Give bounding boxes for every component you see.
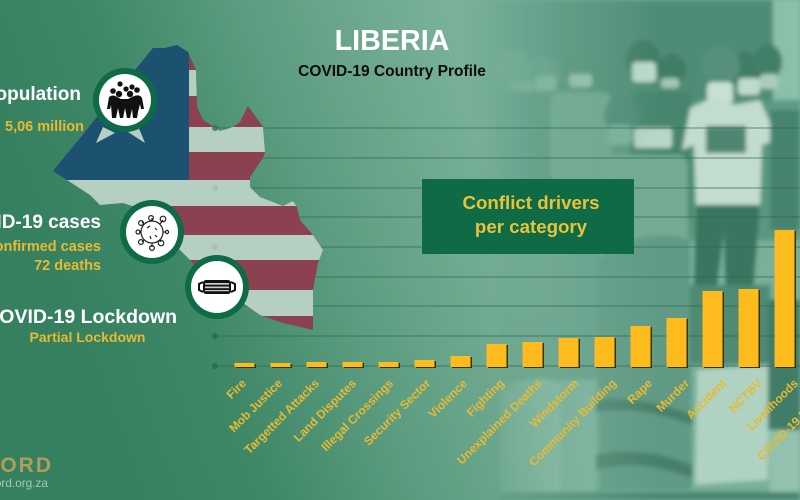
axis category labels: Land Disputes [291, 376, 359, 445]
bar shadows [236, 231, 796, 368]
logo: ACCORD [0, 454, 53, 490]
chart grid lines [212, 128, 800, 369]
icon: face mask [185, 255, 249, 319]
axis category labels: Security Sector [361, 376, 433, 448]
bar chart: conflict drivers [224, 230, 800, 469]
axis category labels: Fighting [464, 376, 507, 420]
stat: population [0, 84, 84, 135]
background photo: masked people [470, 0, 800, 500]
callout: conflict drivers per category: per category [475, 216, 588, 237]
axis category labels: Murder [653, 376, 692, 415]
stat: COVID-19 cases: 72 deaths [34, 258, 101, 274]
axis category labels: NCTBV [726, 376, 765, 415]
axis category labels: Targetted Attacks [241, 376, 322, 457]
map of Liberia with flag [50, 40, 330, 335]
axis category labels: Illegal Crossings [318, 376, 396, 454]
axis category labels: Mob Justice [226, 376, 285, 435]
stat: COVID-19 lockdown [0, 306, 177, 345]
stat: COVID-19 cases [0, 212, 101, 274]
bars [234, 230, 794, 367]
axis category labels [224, 371, 800, 469]
icon: population group [93, 68, 157, 132]
grid dots over map [212, 125, 218, 250]
axis category labels: Rape [624, 376, 655, 407]
stat: COVID-19 lockdown: Partial Lockdown [30, 329, 145, 345]
title: LIBERIA [335, 25, 449, 57]
axis category labels: Accident [683, 376, 729, 422]
subtitle: COVID-19 Country Profile [298, 63, 486, 80]
axis category labels: Unexplained Deaths [454, 376, 545, 467]
icon: virus [120, 200, 184, 264]
axis category labels: Livelihoods [744, 376, 800, 433]
callout: conflict drivers per category [422, 179, 634, 254]
axis category labels: Community Building [526, 376, 619, 469]
axis category labels: Windstorm [527, 376, 581, 430]
callout: conflict drivers per category: Conflict drivers [462, 192, 600, 213]
axis category labels: Fire [224, 376, 249, 402]
stat: population: 5,06 million [5, 119, 84, 135]
axis category labels: Violence [425, 376, 470, 421]
